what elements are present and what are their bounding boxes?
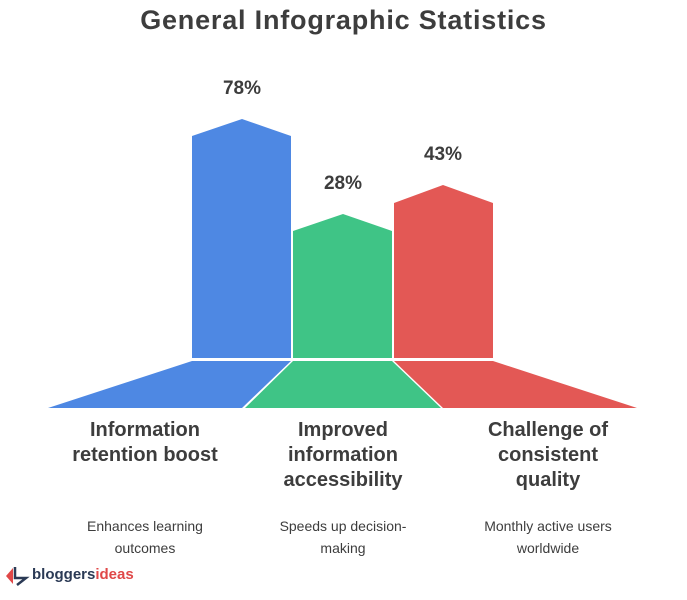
value labels: 28% [324, 173, 362, 194]
bar: blue 78% [48, 119, 291, 408]
desc 2: Speeds up decision-making [280, 518, 406, 556]
bar: red 43% [394, 185, 637, 408]
icon: logo mark [6, 567, 30, 586]
desc 3: Monthly active users worldwide [484, 518, 612, 556]
title: General Infographic Statistics [140, 5, 547, 35]
label: retention: Information retention boost [72, 419, 218, 466]
label: accessibility: Improved information accessibility [284, 419, 402, 491]
value labels [223, 78, 462, 194]
value labels: 78% [223, 78, 261, 99]
value labels: 43% [424, 144, 462, 165]
logo: bloggersideas [32, 566, 134, 583]
logo [6, 566, 134, 586]
chart [48, 78, 637, 408]
desc 1: Enhances learning outcomes [87, 518, 203, 556]
bar: green 28% [245, 214, 441, 408]
label: quality: Challenge of consistent quality [488, 419, 608, 491]
